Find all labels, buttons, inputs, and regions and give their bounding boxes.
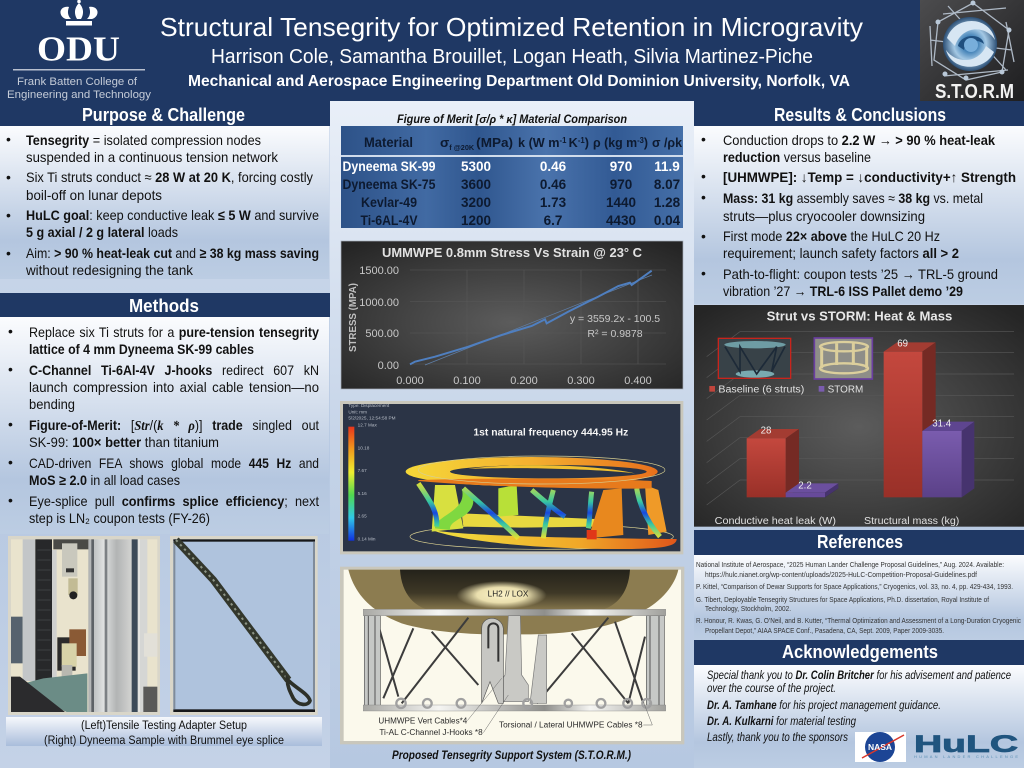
header: ODU logo bbox=[7, 0, 152, 101]
table row: Kevlar: 1.28 bbox=[654, 195, 681, 210]
heading: Acknowledgements bbox=[782, 642, 938, 662]
ring structure bbox=[406, 456, 677, 549]
inset: baseline struts bbox=[718, 338, 791, 378]
callout labels: Torsional / Lateral UHMWPE Cables *8 bbox=[499, 721, 643, 730]
heading: References bbox=[817, 532, 903, 552]
text block: results bullets: • bbox=[701, 131, 706, 147]
chart title: UMMWPE 0.8mm Stress Vs Strain @ 23° C bbox=[382, 245, 643, 260]
table row: SK-75: 0.46 bbox=[540, 177, 567, 192]
value labels bbox=[761, 339, 952, 492]
text block: results bullets: First mode 22× above the HuLC 20 Hz bbox=[723, 228, 940, 244]
axis labels: Structural mass (kg) bbox=[864, 516, 959, 527]
text block: methods bullets: • bbox=[8, 416, 13, 432]
photo: tensile testing setup bbox=[8, 536, 160, 715]
legend scale: 10.18 bbox=[358, 445, 370, 450]
bar: baseline mass bbox=[884, 342, 936, 497]
text block: methods bullets: SK-99: 100× better than titanium bbox=[29, 434, 219, 450]
text block: reference list: Propellant Depot,” AIAA SPACE Conf., Pasadena, CA, Sept. 2009, Paper 2009-3035. bbox=[705, 626, 944, 635]
legend scale: 2.65 bbox=[358, 514, 367, 519]
text block: methods bullets: lattice of 4 mm Dyneema SK-99 cables bbox=[29, 341, 254, 357]
table header: k (W m bbox=[518, 135, 561, 150]
text block: results bullets: • bbox=[701, 228, 706, 244]
frequency label: 1st natural frequency 444.95 Hz bbox=[473, 428, 628, 439]
table row: SK-99 bbox=[342, 159, 680, 174]
heading: Results & Conclusions bbox=[774, 105, 946, 125]
value labels: 31.4 bbox=[932, 419, 952, 430]
text block: reference list bbox=[696, 560, 1021, 635]
text block: thanks: over the course of the project. bbox=[707, 681, 836, 695]
text block: methods bullets: CAD-driven FEA shows global mode 445 Hz and bbox=[29, 455, 319, 471]
y axis labels: 1500.00 bbox=[359, 265, 399, 277]
text block: reference list: Technology, Stockholm, 2002. bbox=[705, 604, 791, 613]
value labels: 2.2 bbox=[798, 481, 812, 492]
table row: SK-99: 5300 bbox=[461, 159, 491, 174]
table row: SK-99: 11.9 bbox=[654, 159, 680, 174]
text block: results bullets: Mass: 31 kg assembly saves ≈ 38 kg vs. metal bbox=[723, 190, 983, 206]
authors: Harrison Cole, Samantha Brouillet, Logan Heath, Silvia Martinez-Piche bbox=[211, 46, 813, 68]
table row: SK-75: 970 bbox=[610, 177, 632, 192]
text block: purpose bullets: HuLC goal: keep conductive leak ≤ 5 W and survive bbox=[26, 207, 319, 223]
chart: strut vs STORM heat and mass bbox=[694, 305, 1024, 527]
panel: methods bbox=[0, 293, 330, 534]
caption: support system: Proposed Tensegrity Support System (S.T.O.R.M.) bbox=[392, 748, 631, 762]
text block: results bullets: [UHMWPE]: ↓Temp = ↓conductivity+↑ Strength bbox=[723, 169, 1016, 185]
text block: reference list: https://hulc.nianet.org/wp-content/uploads/2025-HuLC-Competition-Proposal-Guidelines.pdf bbox=[705, 570, 978, 579]
x axis labels bbox=[396, 375, 652, 387]
heading: material table title: Figure of Merit [σ/ρ * κ] Material Comparison bbox=[397, 114, 627, 126]
axis labels bbox=[715, 516, 959, 527]
text block: methods bullets: Figure-of-Merit: [Str/(k * ρ)] trade singled out bbox=[29, 417, 319, 434]
tank bbox=[348, 570, 678, 634]
text block: purpose bullets: without redesigning the tank bbox=[25, 262, 194, 278]
text block: methods bullets: bending bbox=[29, 396, 75, 412]
text block: methods bullets bbox=[8, 323, 319, 526]
panel: references bbox=[694, 530, 1024, 640]
table row: titanium: 0.04 bbox=[654, 213, 681, 228]
legend scale: 5.16 bbox=[358, 491, 367, 496]
x axis labels: 0.100 bbox=[453, 375, 481, 387]
table header: σ bbox=[440, 135, 449, 150]
heading: Purpose & Challenge bbox=[82, 105, 245, 125]
table row: titanium: 1200 bbox=[461, 213, 491, 228]
table row: titanium: Ti-6AL-4V bbox=[360, 213, 418, 228]
text block: results bullets: Path-to-flight: coupon tests ’25 → TRL-5 ground bbox=[723, 266, 998, 282]
icon: HuLC logo: HuLC bbox=[914, 731, 1018, 758]
table header: f @20K bbox=[449, 145, 476, 152]
text block: methods bullets: Eye-splice pull confirms splice efficiency; next bbox=[29, 493, 319, 509]
legend scale bbox=[348, 403, 396, 542]
heading: Methods bbox=[129, 296, 199, 316]
table header: -1 bbox=[560, 136, 569, 145]
text block: results bullets: Conduction drops to 2.2 W → > 90 % heat-leak bbox=[723, 132, 995, 148]
y axis title: STRESS (MPA) bbox=[348, 283, 359, 352]
tank: LH2 // LOX bbox=[488, 590, 529, 599]
text block: purpose bullets: Six Ti struts conduct ≈ 28 W at 20 K, forcing costly bbox=[26, 169, 313, 185]
legend scale: 7.67 bbox=[358, 468, 367, 473]
text block: thanks bbox=[707, 668, 1011, 744]
caption: tensile test photos bbox=[6, 717, 322, 747]
trendline equation bbox=[570, 313, 660, 340]
text block: methods bullets: C-Channel Ti-6Al-4V J-hooks redirect 607 kN bbox=[29, 362, 319, 378]
table header: Material bbox=[364, 134, 413, 150]
bar: baseline heat leak bbox=[743, 429, 838, 497]
text block: thanks: Dr. A. Kulkarni for material testing bbox=[707, 714, 856, 728]
chart: stress vs strain bbox=[341, 241, 683, 389]
y axis labels: 1000.00 bbox=[359, 297, 399, 309]
text block: methods bullets: Replace six Ti struts for a pure-tension tensegrity bbox=[29, 324, 319, 340]
axis labels: Conductive heat leak (W) bbox=[715, 516, 836, 527]
text block: methods bullets: MoS ≥ 2.0 in all load cases bbox=[29, 472, 180, 488]
text block: results bullets: • bbox=[701, 189, 706, 205]
legend scale: Unit: mm bbox=[348, 409, 367, 414]
data line bbox=[410, 271, 652, 365]
header: ODU logo: Frank Batten College of bbox=[17, 76, 138, 88]
text block: methods bullets: • bbox=[8, 361, 13, 377]
table header: -3 bbox=[637, 136, 644, 145]
legend: STORM bbox=[828, 385, 863, 396]
panel: results and conclusions bbox=[694, 101, 1024, 304]
table row: SK-75: 3600 bbox=[461, 177, 491, 192]
x axis labels: 0.200 bbox=[510, 375, 538, 387]
text block: purpose bullets: • bbox=[6, 245, 11, 261]
text block: purpose bullets bbox=[6, 131, 319, 278]
trendline equation: y = 3559.2x - 100.5 bbox=[570, 313, 660, 325]
table header bbox=[364, 134, 683, 152]
legend scale: 5/2/2025, 12:54:58 PM bbox=[348, 415, 396, 420]
text block: purpose bullets: • bbox=[6, 169, 11, 185]
x axis labels: 0.400 bbox=[624, 375, 652, 387]
text block: results bullets: requirement; launch safety factors all > 2 bbox=[723, 245, 959, 261]
text block: purpose bullets: boil-off on lunar depots bbox=[26, 187, 162, 203]
text block: purpose bullets: Tensegrity = isolated compression nodes bbox=[26, 132, 261, 148]
table row: Kevlar: Kevlar-49 bbox=[361, 195, 417, 210]
caption: tensile test photos: (Left)Tensile Testing Adapter Setup bbox=[81, 720, 247, 732]
table row: SK-99: 970 bbox=[610, 159, 632, 174]
table row: SK-75: 8.07 bbox=[654, 177, 680, 192]
icon: STORM logo bbox=[920, 0, 1024, 103]
icon: NASA logo bbox=[855, 732, 906, 762]
table header: (MPa) bbox=[476, 135, 513, 150]
text block: results bullets: reduction versus baseline bbox=[723, 149, 871, 165]
header: ODU logo: ODU bbox=[37, 30, 120, 68]
legend scale: Type: Displacement bbox=[348, 403, 390, 408]
table row: titanium: 6.7 bbox=[544, 213, 562, 228]
text block: results bullets: • bbox=[701, 168, 706, 184]
icon: NASA logo: NASA bbox=[868, 742, 892, 752]
bar: STORM mass bbox=[922, 422, 974, 497]
y axis labels: 500.00 bbox=[365, 328, 399, 340]
table row: titanium: 4430 bbox=[606, 213, 636, 228]
table row: SK-99: 0.46 bbox=[540, 159, 567, 174]
table row: titanium bbox=[360, 213, 681, 228]
table row: SK-75 bbox=[342, 177, 680, 192]
table: material comparison bbox=[341, 126, 683, 228]
text block: purpose bullets: • bbox=[6, 131, 11, 147]
table header: ) bbox=[644, 135, 648, 150]
department: Mechanical and Aerospace Engineering Department Old Dominion University, Norfolk, VA bbox=[188, 73, 850, 90]
text block: results bullets: struts—plus cryocooler downsizing bbox=[723, 208, 925, 224]
table header: -1 bbox=[578, 136, 585, 145]
table row: SK-75: Dyneema SK-75 bbox=[342, 177, 436, 192]
text block: methods bullets: • bbox=[8, 323, 13, 339]
legend scale: 0.14 Min bbox=[358, 537, 376, 542]
table header: K bbox=[569, 135, 578, 150]
text block: methods bullets: • bbox=[8, 492, 13, 508]
caption: tensile test photos: (Right) Dyneema Sample with Brummel eye splice bbox=[44, 735, 284, 747]
table row: Kevlar: 1440 bbox=[606, 195, 636, 210]
figure: FEA modal analysis bbox=[340, 401, 683, 554]
text block: methods bullets: step is LN₂ coupon tests (FY-26) bbox=[29, 510, 210, 526]
table header: ρ (kg m bbox=[593, 135, 639, 150]
support frame bbox=[363, 609, 666, 711]
icon: HuLC logo: HUMAN LANDER CHALLENGE bbox=[914, 754, 1018, 759]
x axis labels: 0.000 bbox=[396, 375, 424, 387]
legend: Baseline (6 struts) bbox=[718, 385, 804, 396]
y axis labels bbox=[359, 265, 399, 372]
text block: results bullets: • bbox=[701, 265, 706, 281]
icon: crown bbox=[60, 0, 98, 25]
callout labels bbox=[378, 678, 652, 737]
text block: purpose bullets: Aim: > 90 % heat-leak cut and ≥ 38 kg mass saving bbox=[26, 245, 319, 261]
icon: HuLC logo bbox=[914, 731, 1018, 759]
x axis labels: 0.300 bbox=[567, 375, 595, 387]
panel: purpose and challenge bbox=[0, 101, 330, 279]
callout labels: Ti-AL C-Channel J-Hooks *8 bbox=[379, 728, 483, 737]
value labels: 69 bbox=[897, 339, 908, 350]
text block: thanks: Dr. A. Tamhane for his project management guidance. bbox=[707, 698, 941, 712]
value labels: 28 bbox=[761, 426, 771, 437]
inset: STORM structure bbox=[814, 338, 872, 379]
text block: methods bullets: • bbox=[8, 454, 13, 470]
legend scale: 12.7 Max bbox=[358, 422, 377, 427]
text block: purpose bullets: suspended in a continuous tension network bbox=[26, 149, 279, 165]
table header: σ /ρk bbox=[652, 135, 683, 150]
table header: ) bbox=[585, 135, 589, 150]
header: ODU logo: Engineering and Technology bbox=[7, 89, 152, 101]
table row: Kevlar bbox=[361, 195, 681, 210]
text block: thanks: Lastly, thank you to the sponsors bbox=[707, 730, 848, 744]
figure: proposed tensegrity support system bbox=[340, 567, 684, 744]
text block: results bullets bbox=[701, 131, 1016, 299]
table row: Kevlar: 3200 bbox=[461, 195, 491, 210]
chart title: Strut vs STORM: Heat & Mass bbox=[767, 310, 952, 324]
callout labels: UHMWPE Vert Cables*4 bbox=[378, 716, 468, 725]
text block: methods bullets: launch compression into axial cable tension—no bbox=[29, 379, 319, 395]
title: Structural Tensegrity for Optimized Retention in Microgravity bbox=[160, 12, 863, 42]
y axis labels: 0.00 bbox=[378, 360, 399, 372]
trendline equation: R² = 0.9878 bbox=[587, 328, 643, 340]
table row: Kevlar: 1.73 bbox=[540, 195, 567, 210]
text block: results bullets: vibration ’27 → TRL-6 ISS Pallet demo ’29 bbox=[723, 283, 963, 299]
text block: purpose bullets: • bbox=[6, 207, 11, 223]
legend bbox=[709, 385, 863, 396]
bar: STORM heat leak bbox=[786, 483, 838, 497]
table row: SK-99: Dyneema SK-99 bbox=[342, 159, 436, 174]
panel: acknowledgements bbox=[694, 640, 1024, 768]
text block: purpose bullets: 5 g axial / 2 g lateral loads bbox=[26, 224, 178, 240]
photo: Dyneema sample with Brummel eye splice bbox=[170, 536, 318, 715]
